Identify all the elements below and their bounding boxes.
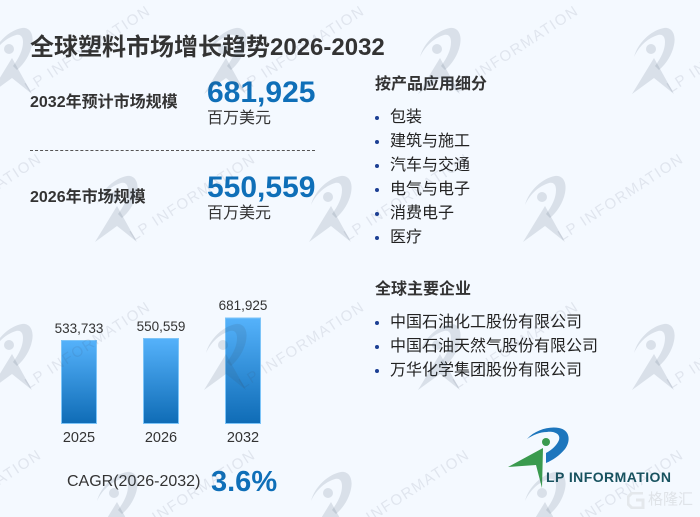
metric: 2026 market size [30, 171, 315, 222]
companies heading: 全球主要企业 [375, 281, 471, 298]
metric: 2032 market size [30, 76, 315, 127]
item: 消费电子 [390, 205, 454, 222]
background watermark pattern: LP INFORMATION [236, 3, 367, 96]
item: 包装 [390, 109, 422, 126]
background watermark pattern: LP INFORMATION [450, 299, 581, 392]
panel: segments by application [375, 75, 487, 246]
background watermark pattern: LP INFORMATION [22, 3, 153, 96]
title: 全球塑料市场增长趋势2026-2032 [30, 34, 385, 61]
bar 2032 [219, 298, 267, 446]
icon: LP Information logo: LP INFORMATION [546, 469, 671, 485]
metric value 2032: 681,925 [207, 76, 315, 109]
background watermark pattern: LP INFORMATION [341, 151, 472, 244]
CAGR value: 3.6% [211, 466, 277, 498]
background watermark pattern: LP INFORMATION [22, 299, 153, 392]
bar 2025: 2025 [63, 430, 95, 446]
CAGR label: CAGR(2026-2032) [67, 473, 200, 490]
icon: LP Information logo [508, 428, 671, 488]
source watermark [627, 491, 693, 509]
segments heading: 按产品应用细分 [375, 76, 487, 93]
background watermark pattern: LP INFORMATION [450, 3, 581, 96]
bar chart [55, 298, 267, 446]
bar 2032: 681,925 [219, 298, 267, 313]
background watermark pattern: LP INFORMATION [127, 151, 258, 244]
metric unit 2026: 百万美元 [207, 205, 271, 222]
company: 中国石油天然气股份有限公司 [390, 338, 598, 355]
background watermark pattern: LP INFORMATION [555, 151, 686, 244]
bar 2026: 2026 [145, 430, 177, 446]
bar 2025: 533,733 [55, 321, 103, 336]
icon: source logo [627, 492, 644, 509]
metric value 2026: 550,559 [207, 171, 315, 204]
item: 电气与电子 [390, 181, 470, 198]
source name: 格隆汇 [648, 491, 693, 508]
bar 2026 [137, 319, 185, 446]
metric label 2032: 2032年预计市场规模 [30, 94, 178, 111]
company: 中国石油化工股份有限公司 [390, 314, 582, 331]
metric label 2026: 2026年市场规模 [30, 189, 146, 206]
bar 2025 [55, 321, 103, 446]
item: 医疗 [390, 229, 422, 246]
metric unit 2032: 百万美元 [207, 110, 271, 127]
company: 万华化学集团股份有限公司 [390, 362, 582, 379]
bar 2026: 550,559 [137, 319, 185, 334]
panel: major companies [375, 280, 598, 379]
background watermark pattern: LP INFORMATION [236, 299, 367, 392]
item: 建筑与施工 [390, 133, 470, 150]
bar 2032: 2032 [227, 430, 259, 446]
dashed divider [30, 150, 315, 151]
item: 汽车与交通 [390, 157, 470, 174]
